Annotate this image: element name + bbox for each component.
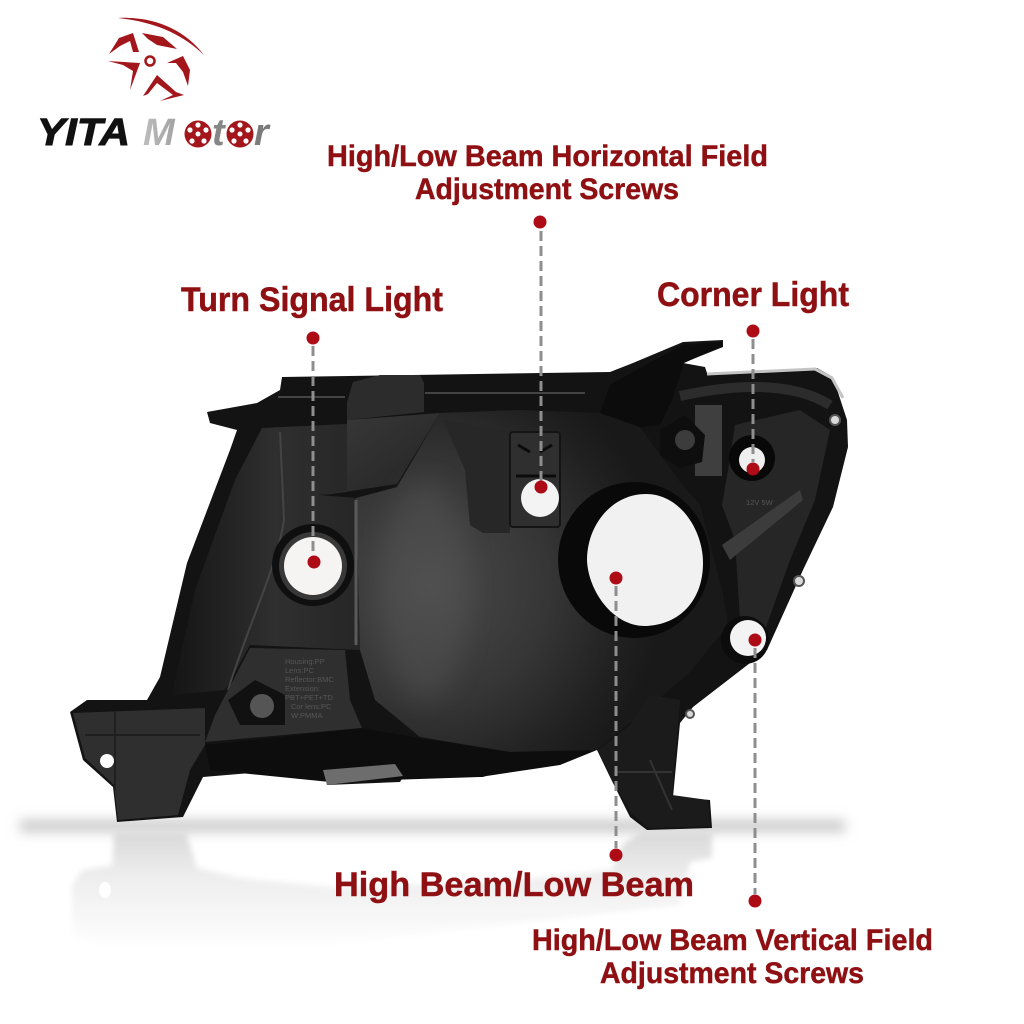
hex plug xyxy=(660,415,705,468)
embossed material text: Cor lens:PC xyxy=(291,702,332,711)
corner socket bar xyxy=(722,490,803,560)
right lower bracket xyxy=(598,695,710,828)
bracket ribs xyxy=(85,712,200,790)
chrome lens edge xyxy=(707,369,843,398)
logo: wheel letters xyxy=(184,120,254,148)
silver strips along top xyxy=(278,393,585,397)
label: horizontal adjustment screws xyxy=(327,140,768,206)
raised adjuster block xyxy=(443,420,510,533)
label: vertical adjustment screws xyxy=(532,924,933,990)
vertical ridge xyxy=(354,500,358,645)
vertical adjuster knob xyxy=(730,620,766,656)
embossed material text: Housing:PP xyxy=(285,657,325,666)
headlight silhouette xyxy=(70,340,848,830)
bottom vent strip xyxy=(205,728,597,782)
logo: YITA wordmark: YITA xyxy=(37,112,130,154)
top tube xyxy=(680,387,830,405)
bracket hole xyxy=(100,754,114,768)
main hole rim xyxy=(558,482,710,638)
small tab xyxy=(323,764,403,785)
adjuster mount plate xyxy=(510,432,560,527)
bulb rating text: 12V 5W xyxy=(746,498,774,507)
left hole rim xyxy=(272,524,354,606)
panel ridge xyxy=(228,432,284,690)
gray lamp strip behind hex plug xyxy=(695,405,722,476)
label: vertical adjustment screws: Adjustment Screws xyxy=(600,957,864,990)
embossed material text: W:PMMA xyxy=(291,711,323,720)
logo: Motor wordmark: Motor xyxy=(143,112,271,154)
socket ring corner xyxy=(729,435,775,481)
marker dots xyxy=(306,216,762,908)
vertical adjuster rim xyxy=(721,616,769,664)
leader lines xyxy=(313,231,755,894)
headlight xyxy=(70,340,848,830)
dome housing xyxy=(356,410,728,752)
screws xyxy=(686,415,840,718)
corner housing panel xyxy=(172,424,360,695)
main hole xyxy=(587,494,703,626)
right bracket ribs xyxy=(617,760,672,810)
lower corner panel xyxy=(205,648,362,742)
label: horizontal adjustment screws: Adjustment Screws xyxy=(415,173,679,206)
floor shadow and reflection xyxy=(20,820,845,950)
top lobes of upper bracket xyxy=(347,375,424,420)
label: vertical adjustment screws: High/Low Beam Vertical Field xyxy=(532,924,933,957)
label: horizontal adjustment screws: High/Low Beam Horizontal Field xyxy=(327,140,768,173)
corner bulb xyxy=(739,447,765,473)
plate clip xyxy=(516,445,556,476)
embossed material text: Reflector:BMC xyxy=(285,675,334,684)
embossed material text: Extension: xyxy=(285,684,320,693)
lens side bracket dark xyxy=(600,342,722,427)
label: high beam low beam: High Beam/Low Beam xyxy=(334,866,694,904)
right corner housing xyxy=(722,410,830,630)
upper bracket block xyxy=(318,413,440,496)
logo xyxy=(37,18,271,154)
label: corner light: Corner Light xyxy=(657,276,849,314)
horizontal adjuster knob xyxy=(521,479,559,517)
left mounting bracket xyxy=(73,708,205,820)
small mount stud xyxy=(228,680,285,725)
embossed material text: Lens:PC xyxy=(285,666,314,675)
logo: wheel mark xyxy=(108,18,204,101)
highlight patch on dome xyxy=(380,480,470,700)
embossed material text: PBT+PET+TD xyxy=(285,693,334,702)
left hole xyxy=(284,537,342,595)
label: turn signal light: Turn Signal Light xyxy=(181,281,443,319)
embossed material text xyxy=(285,657,334,720)
